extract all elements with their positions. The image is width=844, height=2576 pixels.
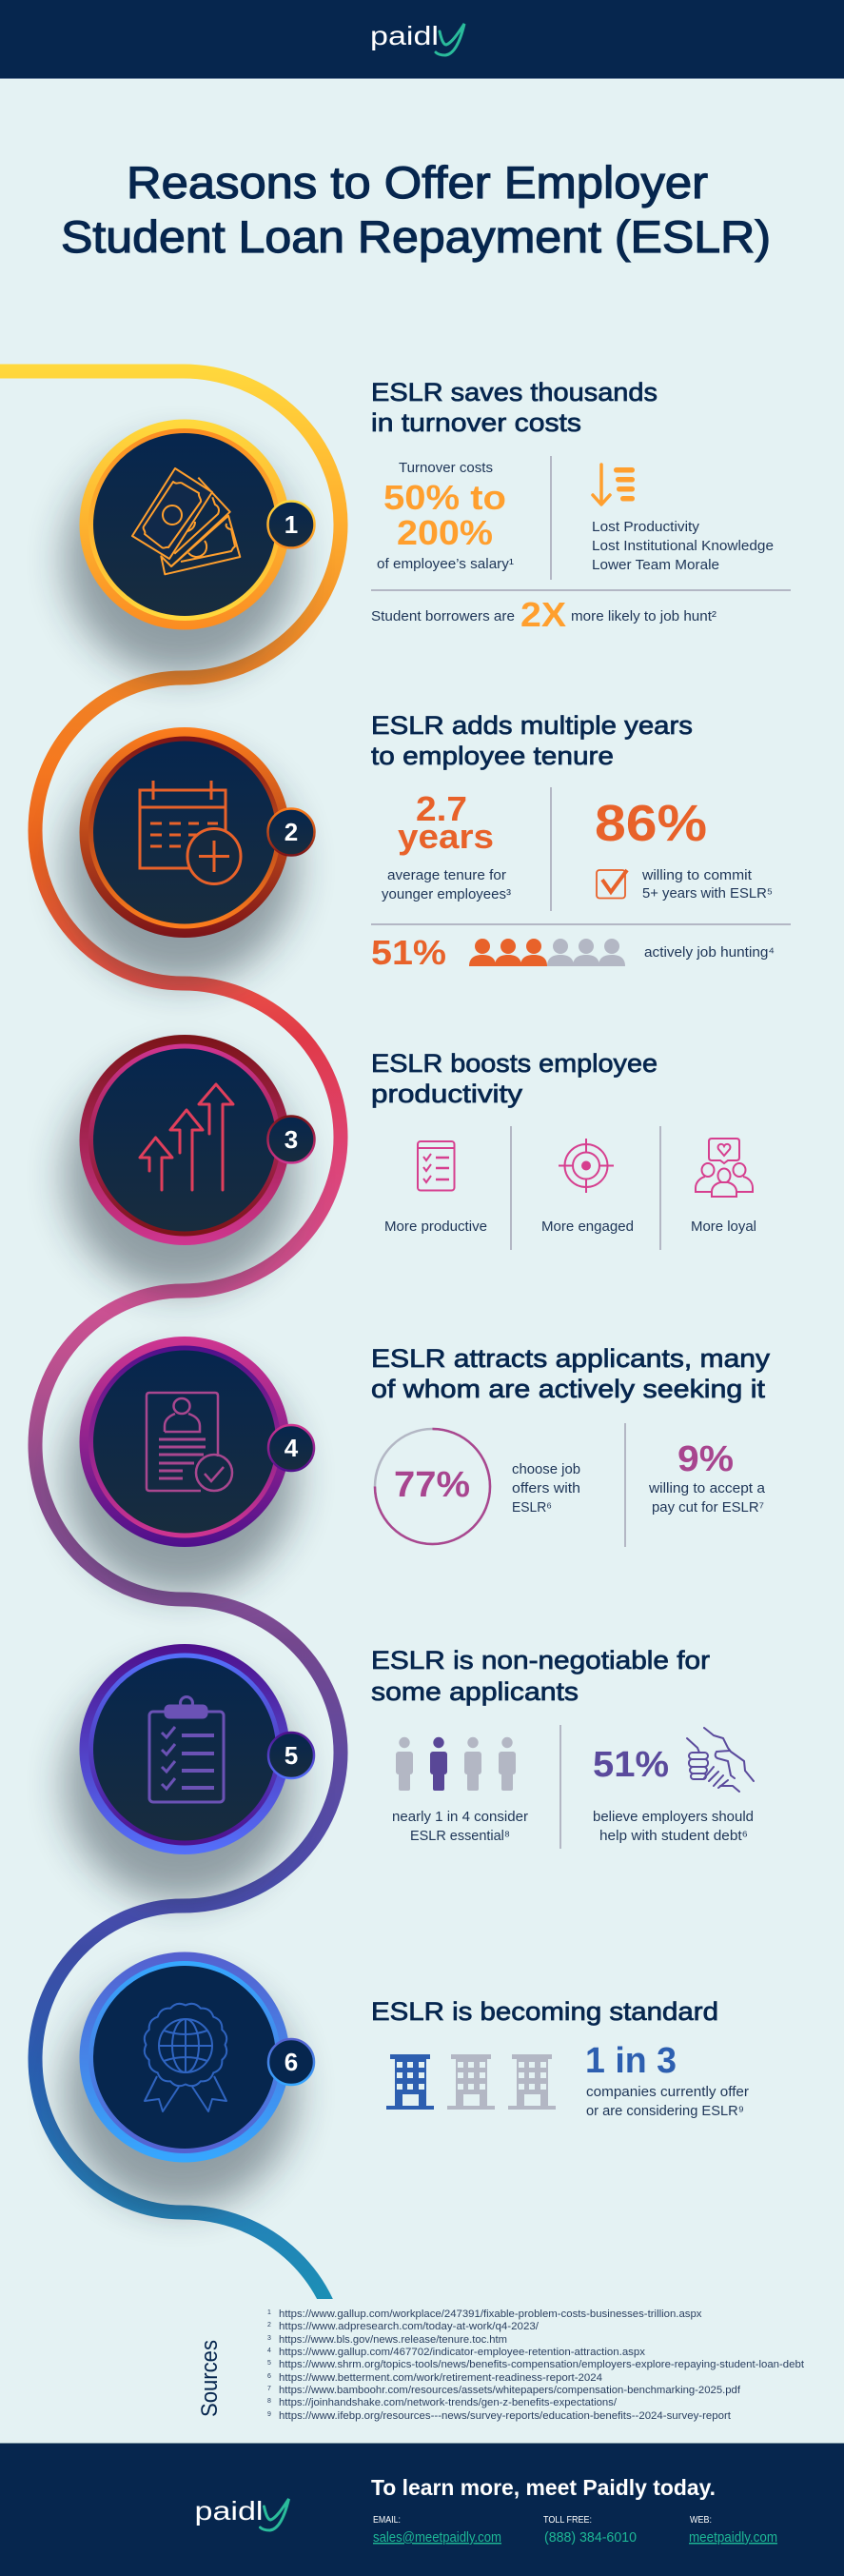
footer logo: paidly: paidl <box>194 2496 263 2526</box>
stat: 1 in 3: or are considering ESLR⁹ <box>586 2104 744 2119</box>
icon: four people <box>396 1737 516 1791</box>
number badge 6: 6 <box>285 2048 298 2076</box>
sources list: 9 <box>267 2411 271 2418</box>
icon: resume <box>147 1393 232 1491</box>
badge circle 3 with arrows icon <box>80 1035 289 1245</box>
title: Reasons to Offer Employer <box>127 157 708 208</box>
stat: 51% job hunting: 51% <box>371 933 446 972</box>
panel: 4 attracts applicants <box>80 1337 771 1547</box>
heading: in turnover costs <box>371 408 581 437</box>
text: willing to commit: willing to commit <box>641 868 752 883</box>
stat: 50% to 200% <box>377 461 514 572</box>
title: Student Loan Repayment (ESLR) <box>61 211 771 262</box>
number badge 1: 1 <box>285 510 298 539</box>
sources list: 1 <box>267 2309 271 2316</box>
icon: money bills <box>132 468 240 574</box>
text: believe employers: believe employers should <box>593 1810 754 1825</box>
soft shadows under the circles <box>65 444 297 2209</box>
panel: 6 becoming standard <box>80 1952 749 2163</box>
heading: ESLR is non-negotiable for <box>371 1646 710 1674</box>
heading <box>371 1049 658 1108</box>
text: believe employers <box>593 1810 754 1844</box>
text: more engaged: More engaged <box>541 1219 634 1235</box>
number badge 5: 5 <box>285 1741 298 1770</box>
contact values: (888) 384-6010 <box>544 2530 637 2546</box>
stat: 9%: willing to accept a <box>648 1481 766 1496</box>
footer call to action: To learn more, meet Paidly today. <box>371 2475 716 2500</box>
sources list: 7 <box>267 2386 271 2392</box>
icon: clipboard <box>149 1696 224 1802</box>
text: willing to commit <box>641 868 773 902</box>
stat: 50% to 200%: of employee’s salary¹ <box>377 557 514 572</box>
text: choose job offers: ESLR⁶ <box>512 1500 552 1516</box>
donut: 77% <box>375 1429 490 1544</box>
sources list: https://www.bls.gov/news.release/tenure.toc.htm <box>279 2334 507 2346</box>
heading: of whom are actively seeking it <box>371 1375 766 1403</box>
sources list: https://www.shrm.org/topics-tools/news/benefits-compensation/employers-explore-repaying-student-loan-debt <box>279 2359 804 2370</box>
panel: 5 non-negotiable <box>80 1644 754 1854</box>
icon: calendar plus <box>140 781 241 883</box>
stat: 1 in 3: 1 in 3 <box>585 2041 677 2081</box>
sources list: 3 <box>267 2335 271 2342</box>
panel: 3 productivity <box>80 1035 756 1250</box>
panel: 1 turnover costs <box>80 378 791 634</box>
sources list: https://joinhandshake.com/network-trends/gen-z-benefits-expectations/ <box>279 2397 618 2408</box>
contact labels: TOLL FREE: <box>543 2515 592 2526</box>
number badge 3: 3 <box>285 1125 298 1154</box>
stat: 2X more likely: Student borrowers are <box>371 609 515 624</box>
icon: checklist <box>418 1141 455 1190</box>
stat: 50% to 200%: 200% <box>397 513 493 552</box>
stat: 2X more likely: more likely to job hunt² <box>571 609 716 624</box>
icon: handshake <box>687 1728 754 1792</box>
badge circle 6 with rosette icon <box>80 1952 289 2163</box>
heading: ESLR saves thousands <box>371 378 658 406</box>
stat: 2.7 years: average tenure for <box>387 868 506 883</box>
heading: ESLR attracts applicants, many <box>371 1344 771 1373</box>
text: more loyal: More loyal <box>691 1219 756 1235</box>
number badge 5 <box>268 1733 314 1778</box>
number badge 3 <box>268 1116 314 1163</box>
heading <box>371 711 693 770</box>
logo: paidly <box>370 21 464 55</box>
contact labels: EMAIL: <box>373 2515 401 2526</box>
stat: 9%: 9% <box>677 1439 734 1479</box>
badge circle 2 with calendar icon <box>80 727 289 938</box>
heading: ESLR adds multiple years <box>371 711 693 740</box>
stat: 86%: 86% <box>595 795 707 852</box>
sources list: 6 <box>267 2373 271 2380</box>
donut: 77%: 77% <box>394 1465 470 1505</box>
text: nearly 1 in 4 <box>392 1810 528 1844</box>
badge circle 1 with money icon <box>80 419 289 630</box>
number badge 6 <box>268 2039 314 2085</box>
panel: 2 employee tenure <box>80 711 791 972</box>
icon: target <box>559 1139 614 1193</box>
list of losses: Lost Productivity <box>592 520 700 535</box>
sources list: 5 <box>267 2360 271 2367</box>
icon: group with heart bubble <box>696 1139 753 1197</box>
text: choose job offers <box>512 1462 580 1516</box>
stat: 50% to 200%: 50% to <box>383 478 506 517</box>
number badge 4: 4 <box>285 1434 299 1462</box>
stat: 2.7 years: years <box>398 817 494 856</box>
heading <box>371 1646 710 1706</box>
stat: 50% to 200%: Turnover costs <box>399 461 493 476</box>
icon: checkbox <box>597 870 627 899</box>
stat: 2X more likely <box>371 595 716 634</box>
text: more productive: More productive <box>384 1219 487 1235</box>
icon: rising arrows <box>140 1084 233 1190</box>
footer <box>0 2443 844 2576</box>
logo: paidly: paidl <box>370 21 439 50</box>
stat: 2.7 years: 2.7 <box>416 789 467 828</box>
sources list: https://www.adpresearch.com/today-at-work/q4-2023/ <box>279 2321 540 2332</box>
sources list <box>267 2308 804 2422</box>
sources heading: Sources <box>197 2340 223 2417</box>
heading: productivity <box>371 1080 523 1108</box>
icon: three buildings <box>386 2054 556 2110</box>
sources list: https://www.gallup.com/workplace/247391/fixable-problem-costs-businesses-trillion.aspx <box>279 2308 702 2320</box>
heading: ESLR is becoming standard <box>371 1997 718 2026</box>
stat: 1 in 3 <box>585 2041 749 2119</box>
header bar <box>0 0 844 79</box>
stat: 51%: 51% <box>593 1745 669 1785</box>
footer logo: paidly <box>194 2496 289 2530</box>
list of losses: Lost Institutional Knowledge <box>592 539 774 554</box>
text: choose job offers: offers with <box>512 1481 580 1496</box>
stat: 9%: pay cut for ESLR⁷ <box>652 1500 764 1516</box>
sources list: 8 <box>267 2398 271 2405</box>
text: choose job offers: choose job <box>512 1462 580 1477</box>
icon: sort down arrow <box>593 465 635 505</box>
heading: ESLR boosts employee <box>371 1049 658 1078</box>
text: actively job hunting: actively job hunting⁴ <box>644 945 775 961</box>
stat: 2.7 years: younger employees³ <box>382 887 511 902</box>
serpentine ribbon <box>0 371 341 2366</box>
number badge 1 <box>268 501 314 548</box>
stat: 2X more likely: 2X <box>520 595 566 634</box>
heading <box>371 378 658 437</box>
icon: rosette globe <box>145 2004 226 2111</box>
heading: some applicants <box>371 1677 579 1706</box>
list of losses: Lower Team Morale <box>592 558 719 573</box>
number badge 2: 2 <box>285 818 298 846</box>
text: willing to commit: 5+ years with ESLR⁵ <box>642 886 773 902</box>
contact labels <box>373 2515 712 2526</box>
icon: six people <box>469 939 625 966</box>
number badge 4 <box>268 1425 314 1471</box>
sources list: https://www.gallup.com/467702/indicator-employee-retention-attraction.aspx <box>279 2347 646 2358</box>
contact values: meetpaidly.com <box>689 2530 777 2546</box>
stat: 1 in 3: companies currently offer <box>586 2085 749 2100</box>
list of losses <box>592 520 774 573</box>
stat: 2.7 years <box>382 789 511 902</box>
contact values <box>373 2530 777 2546</box>
stat: 9% <box>648 1439 766 1516</box>
heading: to employee tenure <box>371 742 614 770</box>
text: believe employers: help with student debt⁶ <box>599 1829 748 1844</box>
sources list: 4 <box>267 2348 271 2354</box>
sources list: https://www.ifebp.org/resources---news/survey-reports/education-benefits--2024-survey-report <box>279 2410 731 2422</box>
badge circle 4 with resume icon <box>80 1337 289 1547</box>
heading <box>371 1344 771 1403</box>
title <box>61 157 771 262</box>
number badge 2 <box>268 809 314 855</box>
sources list: 2 <box>267 2322 271 2328</box>
sources list: https://www.betterment.com/work/retirement-readiness-report-2024 <box>279 2372 602 2384</box>
badge circle 5 with clipboard icon <box>80 1644 289 1854</box>
text: nearly 1 in 4: nearly 1 in 4 consider <box>392 1810 528 1825</box>
contact labels: WEB: <box>690 2515 712 2526</box>
sources list: https://www.bamboohr.com/resources/assets/whitepapers/compensation-benchmarking-2025.pdf <box>279 2385 741 2396</box>
contact values: sales@meetpaidly.com <box>373 2530 501 2546</box>
text: nearly 1 in 4: ESLR essential⁸ <box>410 1829 510 1844</box>
